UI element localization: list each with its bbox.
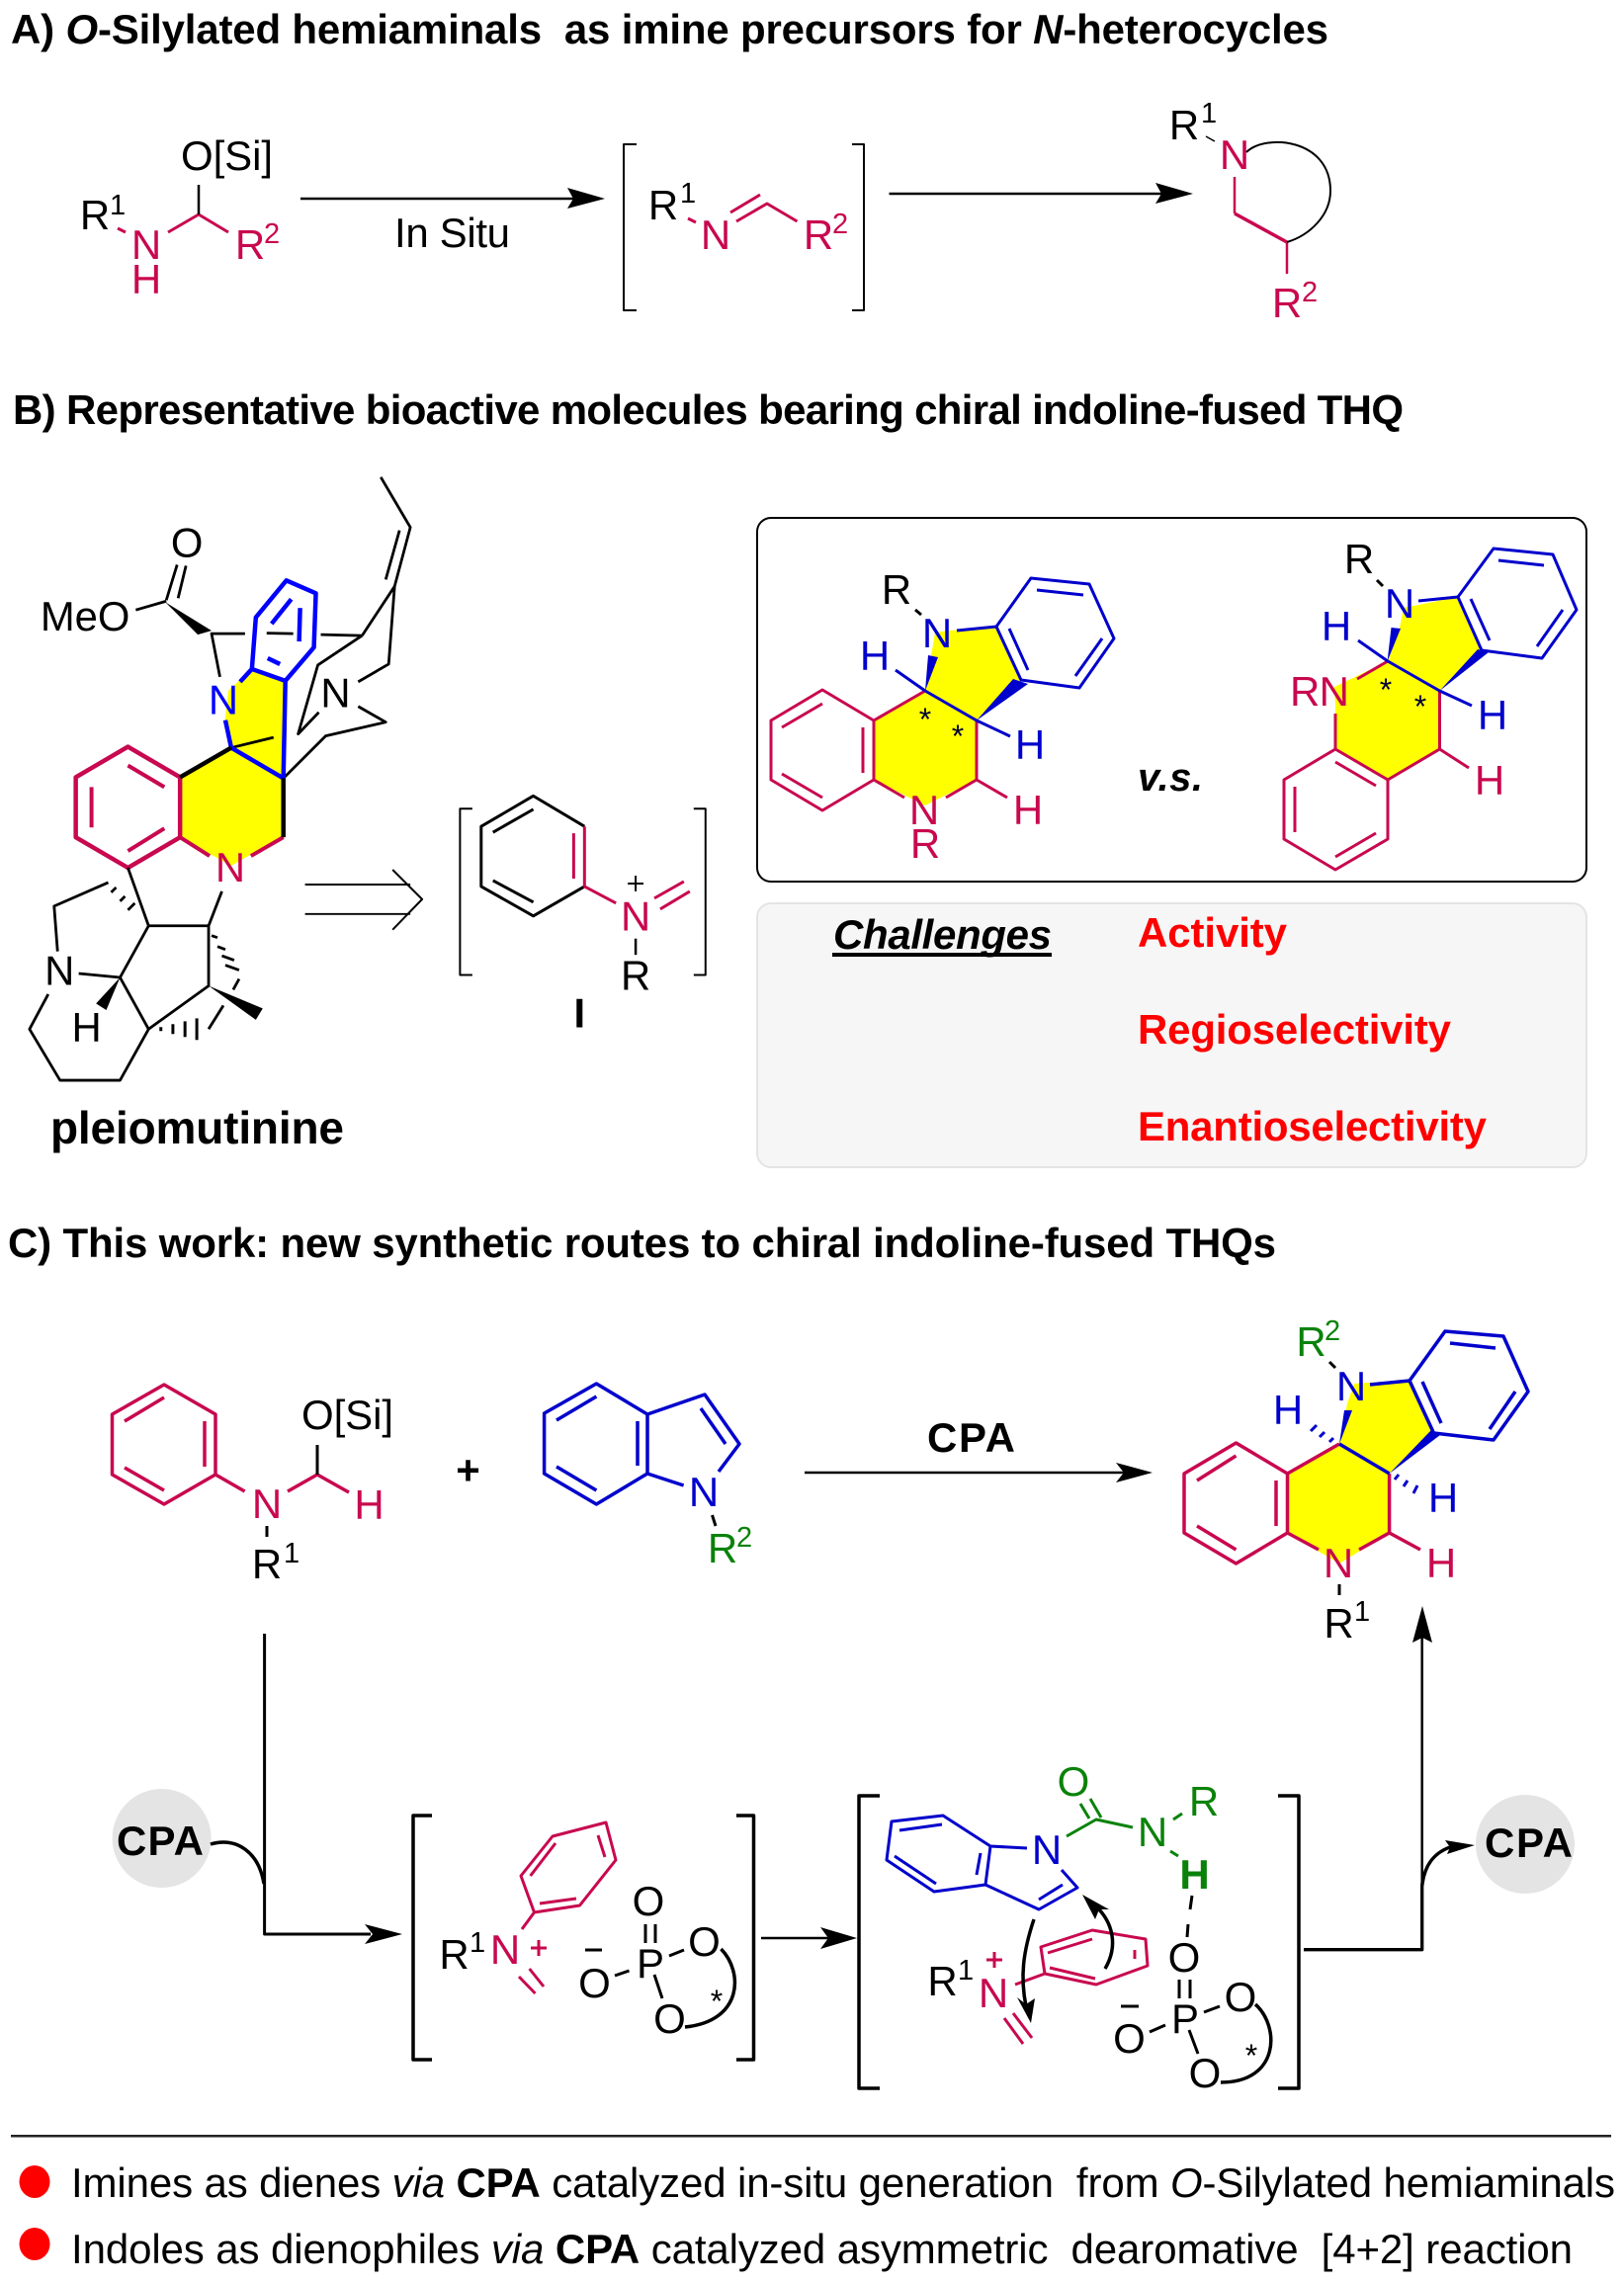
bracketed imine intermediate: 2 [832, 209, 848, 240]
CPA catalyst circle: entry [113, 1789, 264, 1888]
molecule: indoline-fused THQ product: H [1428, 1475, 1458, 1521]
molecule: right isomer: RN [1290, 668, 1349, 715]
heading: section A: A) O-Silylated hemiaminals as imine precursors for N-heterocycles [11, 6, 1328, 52]
molecule: O-silylated hemiaminal: N [131, 221, 161, 268]
molecule: indole: 2 [736, 1522, 752, 1554]
arrow: to product and CPA release [1304, 1606, 1475, 1950]
molecule: left isomer: * [952, 719, 964, 754]
plus sign: + [456, 1447, 480, 1493]
bracketed ion pair intermediate: * [711, 1984, 723, 2019]
arrow: between intermediates [761, 1927, 857, 1949]
arrow: in situ [300, 188, 605, 256]
molecule: right isomer: N [1385, 580, 1414, 627]
bracketed iminium intermediate I: R [621, 952, 650, 998]
lower polycyclic cage: H [72, 1004, 102, 1051]
phosphate: O [1113, 2015, 1146, 2062]
molecule: N-aryl O-silyl hemiaminal: N [252, 1480, 282, 1527]
molecule: left isomer: N [922, 610, 952, 656]
molecule: N-heterocycle product: 2 [1302, 277, 1318, 308]
molecule: O-silylated hemiaminal [80, 132, 280, 302]
ester group [41, 519, 212, 639]
indole urea: O [1058, 1758, 1089, 1805]
text: v.s.: v.s. [1138, 756, 1203, 800]
retrosynthetic arrow [305, 870, 422, 930]
CPA catalyst circle: release [1476, 1795, 1575, 1894]
molecule: left isomer: N [909, 787, 939, 833]
phosphate [1113, 1934, 1271, 2096]
molecule: indoline-fused THQ product: N [1336, 1363, 1366, 1409]
molecule: O-silylated hemiaminal: 1 [110, 190, 126, 221]
bullet: imines as dienes: Imines as dienes via CPA catalyzed in-situ generation from O-Silylated hemiaminals [71, 2159, 1615, 2206]
bracketed iminium intermediate I [460, 796, 706, 1036]
molecule: pleiomutinine [30, 477, 410, 1080]
panel: challenges [757, 903, 1586, 1167]
arrow: CPA: CPA [927, 1414, 1015, 1461]
arrow: in situ: In Situ [394, 210, 510, 256]
lower polycyclic cage: N [44, 947, 74, 993]
molecule: O-silylated hemiaminal: H [131, 256, 161, 302]
molecule: N-aryl O-silyl hemiaminal: H [354, 1481, 385, 1528]
bracketed ion pair intermediate: N [490, 1926, 520, 1973]
bracketed ion pair intermediate: O [578, 1960, 611, 2006]
hydrogen bond [1187, 1896, 1192, 1937]
text: regioselectivity: Regioselectivity [1138, 1006, 1452, 1053]
molecule: right isomer: * [1380, 672, 1392, 708]
indoline part in blue [209, 580, 316, 778]
phosphate: O [1168, 1934, 1200, 1981]
scheme A: imine precursor route [80, 98, 1330, 326]
text: activity: Activity [1138, 909, 1288, 956]
bracketed iminium intermediate I: I [574, 989, 585, 1036]
arrow head [1155, 183, 1193, 204]
text: enantioselectivity: Enantioselectivity [1138, 1103, 1488, 1149]
molecule: indoline-fused THQ product: 1 [1354, 1596, 1370, 1628]
ester group: MeO [41, 593, 129, 639]
lower polycyclic cage [30, 868, 263, 1080]
divider [11, 2135, 1611, 2137]
molecule: right isomer: * [1414, 689, 1426, 724]
bracketed transition state [859, 1758, 1299, 2096]
molecule: N-heterocycle product: 1 [1201, 98, 1217, 129]
molecule: left isomer: H [1013, 787, 1043, 833]
molecule: indoline-fused THQ product [1184, 1315, 1528, 1647]
bracketed ion pair intermediate: O [688, 1918, 721, 1965]
molecule: indoline-fused THQ product: H [1426, 1540, 1456, 1586]
molecule: left isomer: R [910, 820, 940, 867]
molecule: pleiomutinine: N [320, 670, 351, 717]
molecule: indoline-fused THQ product: H [1273, 1387, 1303, 1433]
molecule: indoline-fused THQ product: N [1324, 1540, 1353, 1586]
iminium aryl: 1 [958, 1955, 974, 1987]
phosphate: * [1245, 2038, 1257, 2073]
molecule: indoline-fused THQ product: R [1296, 1318, 1326, 1365]
molecule: N-heterocycle product: R [1272, 280, 1302, 326]
molecule: indole: N [689, 1469, 719, 1515]
indole urea: N [1032, 1826, 1062, 1873]
yellow highlight [180, 669, 286, 866]
molecule: right isomer [1284, 536, 1577, 870]
bracketed ion pair intermediate: O [653, 1995, 686, 2042]
bracketed imine intermediate: R [648, 182, 678, 228]
challenges title: Challenges [833, 911, 1052, 958]
THQ part in crimson [76, 747, 284, 890]
CPA catalyst circle: entry: CPA [117, 1818, 204, 1864]
molecule: left isomer: H [860, 633, 890, 679]
indole urea: N [1138, 1809, 1167, 1855]
curved arrows [1017, 1895, 1113, 2023]
molecule: right isomer: H [1478, 692, 1507, 738]
bracketed ion pair intermediate: 1 [470, 1927, 485, 1959]
phosphate: O [1225, 1974, 1256, 2020]
molecule: left isomer: * [919, 702, 931, 737]
molecule: right isomer: H [1475, 757, 1504, 804]
molecule: N-heterocycle product: N [1220, 131, 1249, 178]
molecule: N-aryl O-silyl hemiaminal: O[Si] [301, 1392, 393, 1438]
molecule: left isomer: R [882, 566, 911, 613]
molecule: N-aryl O-silyl hemiaminal [113, 1385, 393, 1587]
molecule: left isomer: H [1015, 721, 1045, 768]
molecule: right isomer: R [1344, 536, 1374, 582]
molecule: O-silylated hemiaminal: R [235, 221, 265, 268]
molecule: O-silylated hemiaminal: R [80, 192, 110, 238]
molecule: indole: R [708, 1525, 737, 1571]
molecule: indoline-fused THQ product: R [1324, 1600, 1354, 1647]
iminium aryl: R [927, 1958, 958, 2004]
molecule: N-aryl O-silyl hemiaminal: R [252, 1541, 282, 1587]
molecule: N-aryl O-silyl hemiaminal: 1 [284, 1538, 299, 1569]
bullet: indoles as dienophiles: Indoles as dienophiles via CPA catalyzed asymmetric dearomative [4+2] reaction [71, 2226, 1573, 2272]
CPA catalyst circle: release: CPA [1485, 1819, 1573, 1866]
phosphate: O [1189, 2050, 1221, 2096]
arrow: CPA [805, 1414, 1153, 1482]
molecule: indole [545, 1384, 752, 1571]
bracketed ion pair intermediate [413, 1816, 753, 2060]
molecule: indoline-fused THQ product: 2 [1325, 1315, 1340, 1347]
indole urea: H [1179, 1851, 1210, 1898]
bracketed imine intermediate: N [701, 211, 730, 258]
bracketed imine intermediate: R [804, 211, 833, 258]
label: pleiomutinine: pleiomutinine [50, 1102, 344, 1153]
black skeleton [212, 477, 410, 778]
heading: section B: B) Representative bioactive molecules bearing chiral indoline-fused THQ [13, 386, 1404, 433]
arrow: route down to intermediate [265, 1634, 402, 1944]
iminium aryl: N [979, 1970, 1008, 2016]
molecule: left isomer [771, 566, 1114, 867]
heading: section C: C) This work: new synthetic routes to chiral indoline-fused THQs [8, 1220, 1276, 1266]
bracketed ion pair intermediate: R [439, 1931, 470, 1978]
molecule: N-heterocycle product [1169, 98, 1330, 326]
molecule: O-silylated hemiaminal: O[Si] [181, 132, 273, 179]
bracketed iminium intermediate I: N [621, 893, 650, 940]
phosphate: P [1171, 1995, 1199, 2042]
molecule: N-heterocycle product: R [1169, 102, 1199, 148]
molecule: O-silylated hemiaminal: 2 [264, 218, 280, 250]
indole urea [887, 1758, 1219, 1909]
indoline part in blue: N [209, 677, 238, 723]
panel: regioisomer comparison [757, 518, 1586, 882]
iminium aryl [927, 1930, 1148, 2044]
ester group: O [171, 519, 203, 565]
arrow: to N-heterocycle [890, 193, 1166, 195]
bracketed imine intermediate [624, 144, 864, 310]
bracketed ion pair intermediate: O [633, 1878, 664, 1924]
bracketed ion pair intermediate: P [637, 1940, 664, 1987]
indole urea: R [1189, 1778, 1219, 1824]
molecule: right isomer: H [1322, 603, 1351, 649]
bracketed imine intermediate: 1 [680, 178, 696, 210]
THQ part in crimson: N [215, 844, 245, 890]
